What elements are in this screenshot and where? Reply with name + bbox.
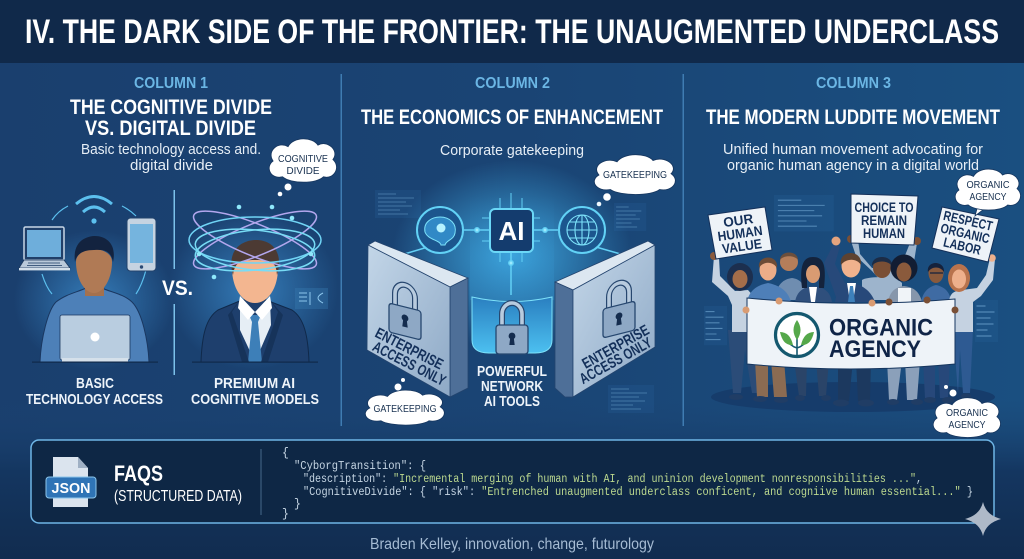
thought cloud: gatekeeping top bbox=[594, 155, 675, 206]
thought cloud: organic agency top bbox=[955, 169, 1021, 216]
sign: choice to remain human: REMAIN bbox=[861, 213, 907, 228]
panel: column 1, cognitive divide bbox=[14, 75, 338, 408]
woman with afro bbox=[888, 286, 922, 302]
left enterprise wall bbox=[367, 241, 468, 397]
icon: globe circle bbox=[559, 207, 605, 253]
label: premium AI cognitive models bbox=[191, 375, 319, 408]
column 2 heading: THE ECONOMICS OF ENHANCEMENT bbox=[361, 106, 663, 129]
man in suit with raised fist bbox=[824, 245, 851, 300]
title bar bbox=[0, 0, 1024, 63]
thought cloud: organic agency bottom: AGENCY bbox=[948, 419, 986, 431]
column 3 label: COLUMN 3 bbox=[816, 75, 891, 92]
label: premium AI cognitive models: PREMIUM AI bbox=[214, 375, 295, 392]
network connectors bbox=[401, 193, 624, 295]
label: powerful network AI tools: POWERFUL bbox=[477, 363, 547, 380]
panel: powerful AI tools glow bbox=[472, 297, 552, 353]
code panels bbox=[704, 195, 998, 345]
icon: small laptop bbox=[19, 227, 70, 270]
right enterprise wall bbox=[555, 241, 655, 397]
column 1 heading: VS. DIGITAL DIVIDE bbox=[85, 117, 256, 140]
wall text: ENTERPRISE bbox=[372, 325, 446, 373]
lock bbox=[389, 281, 421, 340]
column 1 heading: THE COGNITIVE DIVIDE bbox=[70, 96, 272, 119]
person: premium AI bbox=[201, 240, 309, 362]
column 3 subtitle: Unified human movement advocating for bbox=[723, 141, 983, 158]
column 3 subtitle bbox=[723, 141, 983, 174]
thought cloud: gatekeeping top: GATEKEEPING bbox=[603, 169, 667, 181]
icon: wifi bbox=[42, 196, 146, 294]
woman with raised arm bbox=[712, 256, 755, 332]
sign: choice to remain human bbox=[851, 194, 918, 245]
JSON code block: "CognitiveDivide": { "risk": "Entrenched unaugmented underclass conficent, and cogniive human essential..." } bbox=[303, 486, 973, 499]
icon: AI chip bbox=[490, 209, 533, 252]
crowd ground shadow bbox=[711, 382, 995, 412]
JSON code block bbox=[282, 447, 973, 521]
code panels bbox=[375, 190, 654, 413]
column 1 subtitle: digital divide bbox=[130, 157, 213, 174]
woman in dark blazer bbox=[795, 286, 832, 302]
sign: our human value bbox=[708, 207, 772, 259]
column 1 subtitle bbox=[81, 141, 261, 174]
thought cloud: organic agency bottom: ORGANIC bbox=[946, 407, 988, 419]
sign: respect organic labor: LABOR bbox=[942, 235, 983, 258]
panel: column 2, economics of enhancement bbox=[361, 75, 675, 425]
person: basic technology access bbox=[40, 236, 149, 362]
ground line bbox=[192, 362, 318, 363]
icon: brain circle bbox=[417, 207, 463, 253]
JSON code block: } bbox=[294, 498, 301, 511]
sign: respect organic labor: ORGANIC bbox=[939, 221, 991, 246]
legs bbox=[728, 330, 973, 406]
JSON code block: } bbox=[282, 508, 289, 521]
center lock bbox=[496, 303, 528, 354]
banner text: AGENCY bbox=[829, 336, 921, 363]
sign: our human value: OUR bbox=[722, 211, 754, 230]
wall text: ACCESS ONLY bbox=[370, 338, 449, 390]
thought cloud: gatekeeping bottom bbox=[365, 378, 444, 425]
icon: JSON file bbox=[46, 457, 96, 507]
lock bbox=[603, 279, 635, 338]
laptop on desk bbox=[60, 315, 130, 362]
sign: choice to remain human: HUMAN bbox=[863, 226, 905, 241]
column 2 subtitle: Corporate gatekeeping bbox=[440, 142, 584, 159]
thought cloud: cognitive divide: DIVIDE bbox=[286, 165, 320, 177]
small diagram panel bbox=[295, 288, 328, 309]
wall text: ENTERPRISE bbox=[579, 322, 652, 372]
icon: AI orbits bbox=[188, 200, 322, 280]
thought cloud: organic agency top: AGENCY bbox=[970, 191, 1006, 203]
sign: our human value: HUMAN bbox=[717, 223, 763, 244]
vs. separator: VS. bbox=[162, 277, 193, 300]
sign: our human value: VALUE bbox=[721, 236, 763, 257]
label: powerful network AI tools: AI TOOLS bbox=[484, 393, 540, 410]
icon: phone bbox=[127, 218, 156, 271]
thought cloud: organic agency top: ORGANIC bbox=[966, 179, 1010, 191]
label: basic technology access: BASIC bbox=[76, 375, 114, 392]
panel: column 3, modern luddite movement bbox=[704, 75, 1021, 437]
sign: respect organic labor: RESPECT bbox=[942, 208, 995, 234]
lower background shade bbox=[0, 400, 1024, 559]
central light band bbox=[470, 195, 554, 300]
woman with red hair and raised arm bbox=[949, 258, 995, 332]
protest crowd bbox=[710, 235, 996, 406]
banner: organic agency bbox=[742, 296, 958, 369]
logo: leaf bbox=[776, 314, 818, 358]
icon: sparkle star bbox=[965, 502, 1001, 536]
back row: light-shirt people bbox=[775, 278, 806, 300]
ground line bbox=[32, 362, 158, 363]
panel: FAQs structured data bbox=[31, 440, 994, 523]
column 1 label: COLUMN 1 bbox=[134, 75, 208, 92]
JSON code block: { bbox=[282, 447, 289, 460]
icon: JSON file: JSON bbox=[52, 481, 90, 497]
man in blue shirt bbox=[747, 283, 791, 302]
JSON code block: "CyborgTransition": { bbox=[294, 460, 426, 473]
wall text: ACCESS ONLY bbox=[577, 334, 655, 388]
thought cloud: cognitive divide: COGNITIVE bbox=[278, 153, 328, 165]
thought cloud: cognitive divide bbox=[269, 139, 337, 196]
thought cloud: gatekeeping bottom: GATEKEEPING bbox=[374, 403, 436, 415]
label: powerful network AI tools bbox=[477, 363, 547, 410]
man with glasses bbox=[921, 285, 951, 302]
column 2 label: COLUMN 2 bbox=[475, 75, 550, 92]
footer credit: Braden Kelley, innovation, change, futurology bbox=[370, 536, 654, 553]
FAQs heading: FAQS bbox=[114, 461, 163, 486]
label: basic technology access bbox=[26, 375, 163, 408]
column 1 heading bbox=[70, 96, 272, 140]
sign: choice to remain human: CHOICE TO bbox=[854, 200, 914, 215]
column 1 subtitle: Basic technology access and. bbox=[81, 141, 261, 158]
banner text bbox=[829, 314, 933, 363]
thought cloud: organic agency bottom bbox=[933, 385, 1001, 437]
icon: AI chip: AI bbox=[498, 216, 524, 246]
column 3 subtitle: organic human agency in a digital world bbox=[727, 157, 979, 174]
label: basic technology access: TECHNOLOGY ACCESS bbox=[26, 391, 163, 408]
sign: respect organic labor bbox=[932, 207, 999, 262]
structured data subheading: (STRUCTURED DATA) bbox=[114, 488, 242, 505]
JSON code block: "description": "Incremental merging of human with AI, and uninion development nonresponsibilities ...", bbox=[303, 473, 922, 486]
label: premium AI cognitive models: COGNITIVE MODELS bbox=[191, 391, 319, 408]
label: powerful network AI tools: NETWORK bbox=[481, 378, 543, 395]
banner text: ORGANIC bbox=[829, 314, 933, 342]
